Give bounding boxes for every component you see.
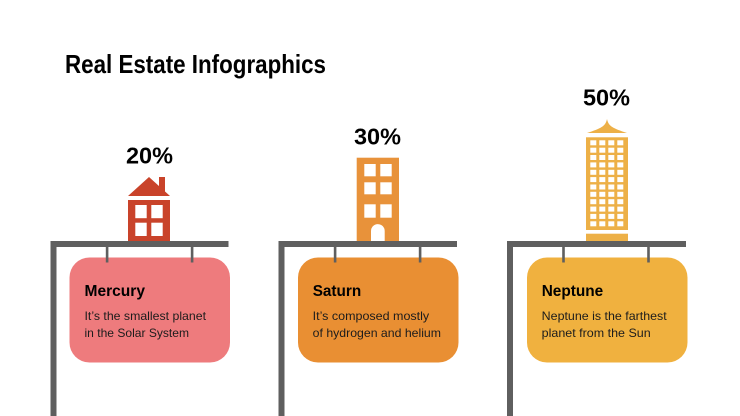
card: Saturn <box>298 258 458 362</box>
card: Saturn: of hydrogen and helium <box>313 326 441 340</box>
card: Saturn: It’s composed mostly <box>313 309 429 323</box>
icon: apartment building <box>357 158 399 241</box>
card: Mercury: Mercury <box>84 283 145 300</box>
card: Neptune <box>527 258 688 362</box>
card: Neptune: Neptune <box>542 283 603 300</box>
signpost: Saturn <box>278 241 457 416</box>
column: Neptune 50% <box>507 85 688 416</box>
icon: skyscraper <box>586 119 628 241</box>
card: Neptune: Neptune is the farthest <box>542 309 667 323</box>
signpost: Neptune <box>507 241 686 416</box>
column: Mercury 20% <box>50 142 230 416</box>
card: Mercury: in the Solar System <box>84 326 189 340</box>
card: Mercury: It’s the smallest planet <box>84 309 207 323</box>
card: Mercury <box>70 258 230 362</box>
percentage: 30%: 30% <box>354 123 401 149</box>
card: Saturn: Saturn <box>313 283 361 300</box>
percentage: 20%: 20% <box>126 142 173 168</box>
column: Saturn 30% <box>278 123 458 416</box>
percentage: 50%: 50% <box>583 85 630 111</box>
title: Real Estate Infographics <box>65 49 326 79</box>
icon: house <box>128 177 170 241</box>
signpost: Mercury <box>50 241 228 416</box>
card: Neptune: planet from the Sun <box>542 326 651 340</box>
